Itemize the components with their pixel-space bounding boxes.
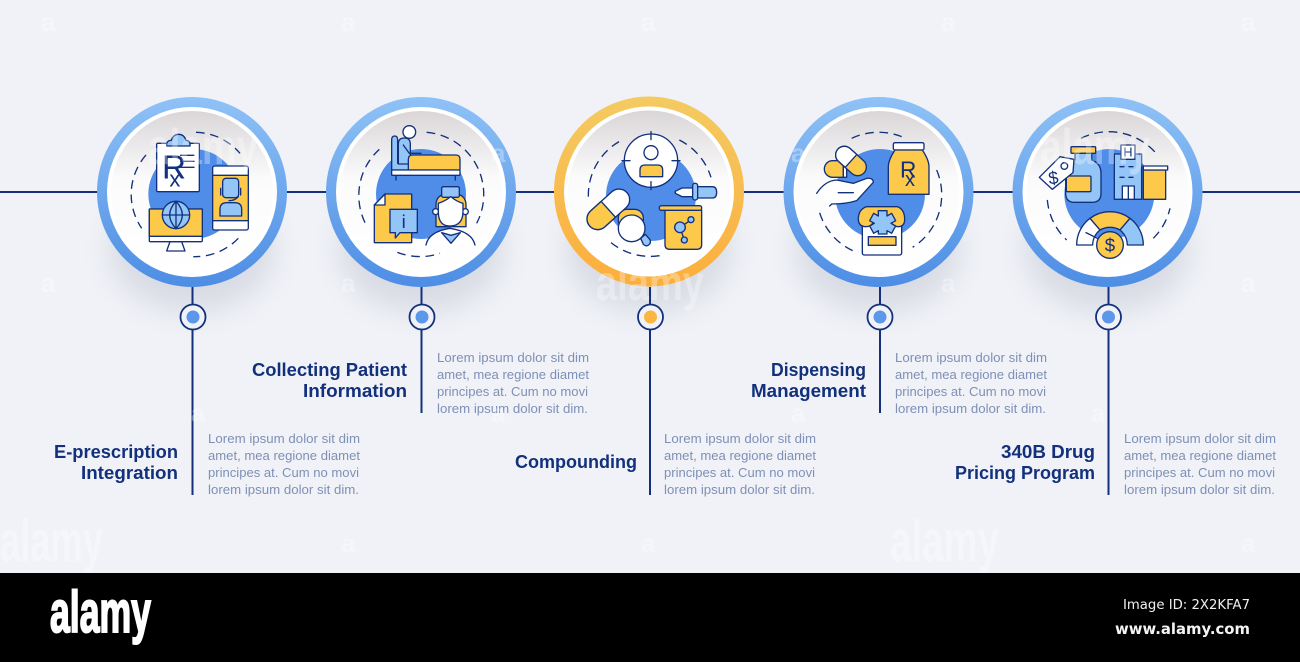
heading: 340B drug pricing program <box>955 441 1095 483</box>
text block: e-prescription description: amet, mea regione diamet <box>208 448 360 463</box>
watermarks: a <box>341 268 356 298</box>
icon: prescription, phone and computer <box>131 132 248 257</box>
icon: patient in bed, document and nurse <box>359 126 484 257</box>
text block: 340B description: principes at. Cum no movi <box>1124 465 1275 480</box>
text block: e-prescription description: principes at. Cum no movi <box>208 465 359 480</box>
text block: compounding description <box>664 431 816 497</box>
watermarks: a <box>41 268 56 298</box>
watermarks: a <box>941 268 956 298</box>
heading: collecting patient information: Information <box>303 380 407 401</box>
icon: target person, pills, dropper and beaker <box>583 132 717 256</box>
heading: collecting patient information <box>252 359 407 401</box>
icon: priced drug bottle, hospital and gauge: H <box>1123 146 1133 160</box>
heading: dispensing management: Dispensing <box>771 359 866 380</box>
watermarks: alamy <box>1040 119 1150 175</box>
panel: dispensing management <box>751 97 1047 416</box>
text block: patient information description: Lorem ipsum dolor sit dim <box>437 350 589 365</box>
text block: patient information description: lorem ipsum dolor sit dim. <box>437 401 588 416</box>
icon: patient in bed, document and nurse: i <box>402 211 406 232</box>
watermarks: a <box>191 398 206 428</box>
watermarks: alamy <box>0 509 103 574</box>
text block: 340B description: lorem ipsum dolor sit dim. <box>1124 482 1275 497</box>
icon: pills in hand, Rx bottle and pharmacy: R <box>900 156 916 182</box>
watermarks: a <box>641 528 656 558</box>
text block: 340B description <box>1124 431 1276 497</box>
icon: pills in hand, Rx bottle and pharmacy: x <box>905 169 915 191</box>
panel: 340B drug pricing program <box>955 97 1276 497</box>
icon: priced drug bottle, hospital and gauge: $ <box>1105 235 1116 256</box>
text block: patient information description: principes at. Cum no movi <box>437 384 588 399</box>
watermarks: a <box>791 398 806 428</box>
watermarks: a <box>341 7 356 37</box>
icon: prescription, phone and computer: x <box>169 167 180 192</box>
text block: compounding description: principes at. Cum no movi <box>664 465 815 480</box>
text block: dispensing description: Lorem ipsum dolor sit dim <box>895 350 1047 365</box>
icon: priced drug bottle, hospital and gauge: $ <box>1047 167 1060 189</box>
panel: collecting patient information <box>252 97 589 416</box>
text block: compounding description: lorem ipsum dolor sit dim. <box>664 482 815 497</box>
website: www.alamy.com <box>1115 620 1250 638</box>
watermarks: alamy <box>596 255 704 311</box>
text block: compounding description: amet, mea regione diamet <box>664 448 816 463</box>
heading: compounding: Compounding <box>515 451 637 472</box>
watermarks: a <box>41 7 56 37</box>
text block: patient information description <box>437 350 589 416</box>
heading: dispensing management: Management <box>751 380 866 401</box>
text block: dispensing description: amet, mea regione diamet <box>895 367 1047 382</box>
watermarks: a <box>1241 528 1256 558</box>
watermarks: a <box>1241 268 1256 298</box>
text block: e-prescription description: lorem ipsum dolor sit dim. <box>208 482 359 497</box>
text block: dispensing description: lorem ipsum dolor sit dim. <box>895 401 1046 416</box>
panel: compounding <box>515 96 816 497</box>
watermarks: a <box>1241 7 1256 37</box>
text block: 340B description: Lorem ipsum dolor sit dim <box>1124 431 1276 446</box>
heading: 340B drug pricing program: 340B Drug <box>1001 441 1095 462</box>
watermarks: a <box>1091 398 1106 428</box>
watermarks: a <box>791 138 806 168</box>
horizontal connector line <box>0 191 1300 193</box>
heading: e-prescription integration: E-prescription <box>54 441 178 462</box>
heading: dispensing management <box>751 359 866 401</box>
text block: e-prescription description: Lorem ipsum dolor sit dim <box>208 431 360 446</box>
image id: Image ID: 2X2KFA7 <box>1123 597 1250 613</box>
heading: collecting patient information: Collecting Patient <box>252 359 407 380</box>
text block: patient information description: amet, mea regione diamet <box>437 367 589 382</box>
text block: e-prescription description <box>208 431 360 497</box>
footer band <box>0 573 1300 662</box>
watermarks: alamy <box>890 509 999 574</box>
text block: dispensing description: principes at. Cum no movi <box>895 384 1046 399</box>
footer logo: alamy <box>50 580 151 645</box>
watermarks: a <box>491 138 506 168</box>
icon: prescription, phone and computer: R <box>162 150 186 187</box>
watermarks: a <box>341 528 356 558</box>
heading: 340B drug pricing program: Pricing Program <box>955 462 1095 483</box>
text block: compounding description: Lorem ipsum dolor sit dim <box>664 431 816 446</box>
text block: 340B description: amet, mea regione diamet <box>1124 448 1276 463</box>
icon: priced drug bottle, hospital and gauge <box>1039 132 1170 258</box>
text block: dispensing description <box>895 350 1047 416</box>
heading: e-prescription integration: Integration <box>81 462 178 483</box>
panel: e-prescription integration <box>54 97 360 497</box>
watermarks: a <box>491 398 506 428</box>
watermarks: alamy <box>148 119 258 175</box>
heading: e-prescription integration <box>54 441 178 483</box>
icon: pills in hand, Rx bottle and pharmacy <box>817 132 942 255</box>
watermarks: a <box>641 7 656 37</box>
watermarks: a <box>941 7 956 37</box>
